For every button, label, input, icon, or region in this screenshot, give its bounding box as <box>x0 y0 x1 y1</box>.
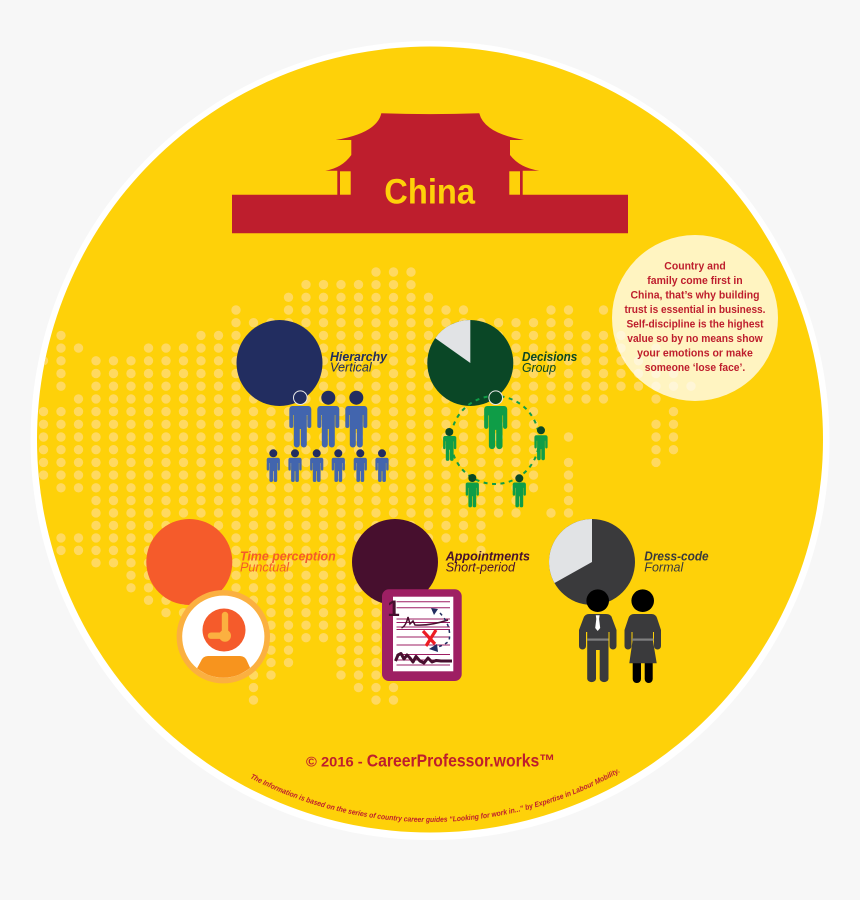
time perception heading: Time perception <box>240 549 336 564</box>
callout text: Self-discipline is the highest <box>626 318 764 330</box>
pagoda silhouette <box>232 113 628 233</box>
appointments value: Short-period <box>446 560 516 575</box>
decisions heading: Decisions <box>522 349 577 364</box>
dashed group ring <box>451 396 539 484</box>
callout text: trust is essential in business. <box>624 304 766 316</box>
dress-code pie <box>549 519 635 605</box>
time perception pie <box>146 519 232 605</box>
callout: business culture note <box>612 235 778 401</box>
callout text <box>624 260 766 374</box>
hierarchy pie <box>236 320 322 406</box>
callout text: Country and <box>664 260 726 272</box>
appointments heading: Appointments <box>445 549 530 564</box>
decisions value: Group <box>522 360 556 375</box>
callout text: someone ‘lose face’. <box>645 362 745 374</box>
copyright line: CareerProfessor.works™ <box>367 751 555 771</box>
panel: dress-code <box>549 519 709 683</box>
header: pagoda with title <box>232 113 628 233</box>
icon: group members <box>443 426 548 507</box>
hierarchy value: Vertical <box>330 360 373 375</box>
icon: calendar note: 1 <box>388 596 400 621</box>
callout text: family come first in <box>647 275 743 287</box>
time perception value: Punctual <box>240 560 290 575</box>
pagoda right pillar gap <box>509 171 520 195</box>
callout text: China, that’s why building <box>630 289 760 301</box>
curved source note: The Information is based on the series of country career guides “Looking for work in...” by Expertise in Labour Mobility. <box>251 769 620 824</box>
decisions pie <box>427 320 513 406</box>
pagoda left pillar gap <box>340 171 351 195</box>
callout text: value so by no means show <box>627 333 763 345</box>
yellow disc <box>37 46 823 832</box>
title: China <box>384 172 475 211</box>
callout circle <box>612 235 778 401</box>
hierarchy heading: Hierarchy <box>330 349 388 364</box>
dress-code heading: Dress-code <box>644 549 709 564</box>
icon: calendar note <box>382 589 462 681</box>
icon: clock badge <box>179 593 267 690</box>
callout text: your emotions or make <box>637 347 753 359</box>
dress-code value: Formal <box>644 560 684 575</box>
icon: group leader <box>484 391 507 449</box>
appointments pie <box>352 519 438 605</box>
panel: decisions <box>427 320 577 507</box>
dotted world map <box>44 272 691 700</box>
panel: hierarchy <box>236 320 389 482</box>
icon: woman in skirt <box>624 589 661 683</box>
icon: junior people <box>267 449 389 482</box>
panel: appointments <box>352 519 530 681</box>
panel: time perception <box>146 519 336 690</box>
icon: senior people <box>289 391 367 448</box>
copyright line: © 2016 - <box>306 754 363 770</box>
icon: man in suit <box>579 589 616 682</box>
